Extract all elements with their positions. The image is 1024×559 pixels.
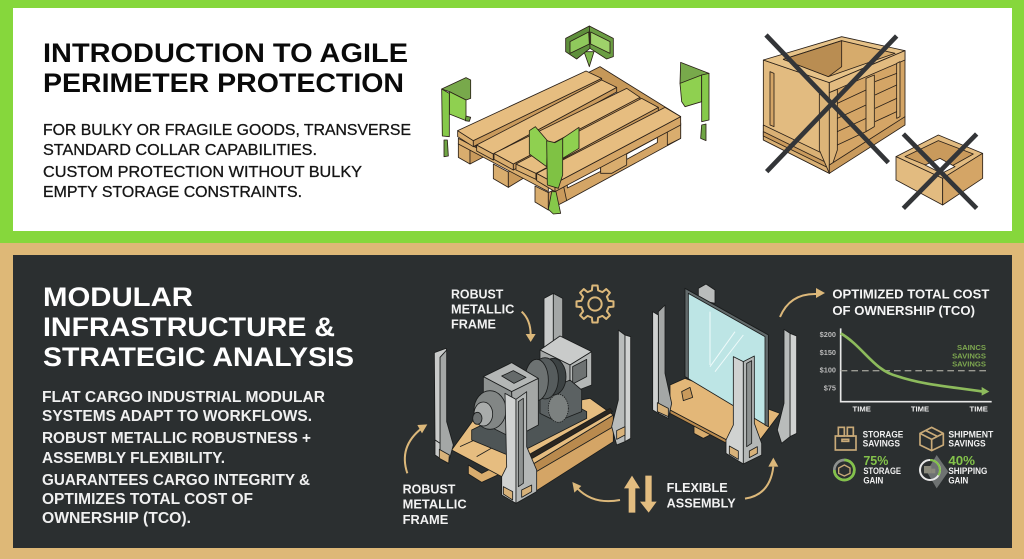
icon: right bracket [680, 62, 709, 141]
icon: up and down arrows [624, 476, 657, 513]
icon: crossed lines [766, 35, 977, 208]
arrow: to pallet [572, 482, 620, 501]
label: storage savings: SAVINGS [863, 439, 900, 449]
heading: modular infrastructure: INFRASTRUCTURE & [43, 312, 335, 342]
arrow: to glass pallet [745, 458, 778, 499]
line chart: total cost over time: $75 [824, 384, 836, 393]
line chart: total cost over time: TIME [970, 405, 988, 414]
illustration: glass panel in metal frame on pallet [653, 284, 797, 464]
text block: modular body: OWNERSHIP (TCO). [42, 510, 191, 527]
line chart: total cost over time [820, 328, 992, 414]
illustration: crossed-out wooden crate [763, 35, 983, 208]
text block: modular body: ASSEMBLY FLEXIBILITY. [42, 450, 225, 467]
label: 75% storage gain: 75% [863, 454, 888, 468]
line chart: total cost over time: $200 [820, 330, 836, 339]
line chart: total cost over time: TIME [911, 405, 929, 414]
pallet [452, 398, 613, 493]
icon: storage gain ring [834, 460, 854, 480]
illustration: machine in metal frame on pallet [434, 293, 631, 503]
right post [612, 330, 631, 445]
text block: modular body: FLAT CARGO INDUSTRIAL MODULAR [42, 389, 325, 406]
text block: introduction body: FOR BULKY OR FRAGILE GOODS, TRANSVERSE [43, 122, 411, 139]
deck planks [458, 71, 681, 192]
icon: front bracket [529, 127, 579, 214]
label: 40% shipping gain: GAIN [948, 475, 968, 485]
text block: introduction body: CUSTOM PROTECTION WITHOUT BULKY [43, 164, 362, 181]
label: storage savings: STORAGE [863, 429, 903, 439]
text block: modular body: OPTIMIZES TOTAL COST OF [42, 491, 253, 508]
illustration: pallet with green corner brackets [442, 26, 709, 214]
icon: gear [577, 286, 613, 322]
panel: top introduction [0, 0, 1024, 243]
line chart: total cost over time: SAVINGS [952, 359, 986, 368]
icon: left bracket [442, 78, 471, 157]
label: 75% storage gain [863, 454, 901, 485]
label: storage savings [863, 429, 903, 449]
icon: top bracket [566, 26, 613, 67]
label: 40% shipping gain: 40% [948, 454, 975, 468]
label: robust metallic frame top: METALLIC [451, 302, 515, 317]
machine [472, 336, 592, 457]
heading: TCO: OPTIMIZED TOTAL COST [832, 286, 989, 301]
label: 40% shipping gain [948, 454, 987, 485]
text block: modular body: SYSTEMS ADAPT TO WORKFLOWS. [42, 408, 312, 425]
text block: modular body: ROBUST METALLIC ROBUSTNESS + [42, 430, 311, 447]
front post [502, 392, 537, 503]
arrow: to top frame [522, 312, 536, 342]
label: shipment savings [948, 429, 994, 449]
label: flexible assembly: FLEXIBLE [667, 480, 728, 495]
pallet base [458, 123, 681, 210]
heading: TCO: OF OWNERSHIP (TCO) [832, 303, 975, 318]
label: flexible assembly [667, 480, 736, 510]
line chart: total cost over time: SAVINGS [952, 351, 986, 360]
panel: bottom modular infrastructure [0, 243, 1024, 559]
heading: introduction [43, 38, 408, 98]
label: robust metallic frame top [451, 287, 515, 332]
label: 40% shipping gain: SHIPPING [948, 466, 987, 476]
left post [434, 348, 453, 463]
heading: modular infrastructure [43, 282, 354, 372]
line chart: total cost over time: $100 [820, 366, 836, 375]
text block: modular body: GUARANTEES CARGO INTEGRITY & [42, 472, 310, 489]
text block: introduction body [43, 122, 411, 201]
label: robust metallic frame top: ROBUST [451, 287, 503, 302]
icon: storage [835, 427, 856, 450]
label: robust metallic frame bottom [403, 481, 467, 527]
label: robust metallic frame bottom: ROBUST [403, 481, 455, 496]
label: robust metallic frame top: FRAME [451, 317, 496, 332]
label: shipment savings: SAVINGS [948, 439, 986, 449]
back post [544, 293, 563, 353]
heading: modular infrastructure: MODULAR [43, 282, 193, 312]
heading: TCO [832, 286, 989, 318]
label: robust metallic frame bottom: FRAME [403, 512, 448, 527]
text block: introduction body: STANDARD COLLAR CAPABILITIES. [43, 142, 317, 159]
arrow: to TCO [780, 288, 825, 317]
label: 75% storage gain: STORAGE [863, 466, 901, 476]
line chart: total cost over time: SAINCS [957, 343, 986, 352]
heading: introduction: PERIMETER PROTECTION [43, 68, 404, 98]
metrics: savings and gains [834, 427, 994, 488]
label: robust metallic frame bottom: METALLIC [403, 496, 467, 511]
label: flexible assembly: ASSEMBLY [667, 495, 736, 510]
line chart: total cost over time: TIME [853, 405, 871, 414]
text block: modular body [42, 389, 325, 527]
line chart: total cost over time: $150 [820, 348, 836, 357]
label: shipment savings: SHIPMENT [948, 429, 994, 439]
cross boards [460, 67, 681, 185]
icon: shipment box [920, 427, 943, 451]
icon: shipping gain ring [920, 455, 948, 488]
text block: introduction body: EMPTY STORAGE CONSTRAINTS. [43, 184, 302, 201]
heading: modular infrastructure: STRATEGIC ANALYSIS [43, 342, 354, 372]
icon: small collar box [896, 135, 983, 205]
label: 75% storage gain: GAIN [863, 475, 883, 485]
heading: introduction: INTRODUCTION TO AGILE [43, 38, 408, 68]
arrow: to left frame [405, 424, 427, 473]
